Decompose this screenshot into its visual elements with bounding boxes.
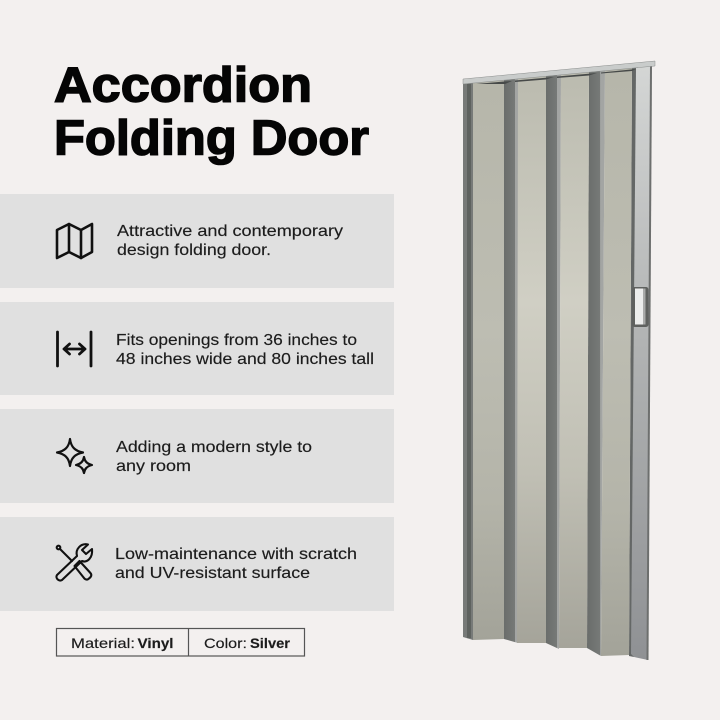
text: style description: any room — [116, 458, 191, 475]
text: design description — [117, 223, 343, 259]
icon: folded map — [57, 224, 92, 258]
panel: style — [0, 409, 394, 503]
panel: design — [0, 194, 394, 288]
title: Folding Door — [54, 112, 369, 166]
left jamb — [463, 83, 473, 640]
icon: crossed tools — [56, 544, 92, 581]
text: material — [71, 635, 174, 651]
panel: maintenance — [0, 517, 394, 611]
text: color: Silver — [250, 635, 291, 651]
panel: size — [0, 302, 394, 395]
text: color — [204, 635, 291, 651]
text: style description — [116, 439, 312, 475]
top rail — [463, 61, 655, 84]
text: size description: Fits openings from 36 inches to — [116, 332, 357, 349]
fold strips — [504, 77, 519, 643]
text: maintenance description: Low-maintenance with scratch — [115, 546, 357, 563]
text: material: Material: — [71, 635, 135, 651]
title: Accordion — [54, 58, 312, 112]
door illustration — [463, 61, 655, 660]
text: maintenance description — [115, 546, 357, 582]
text: style description: Adding a modern style to — [116, 439, 312, 456]
right edge panel — [631, 66, 652, 660]
text: color: Color: — [204, 635, 247, 651]
icon: sparkles — [57, 439, 92, 473]
rail shadow — [476, 69, 636, 84]
text: design description: Attractive and contemporary — [117, 223, 343, 240]
title — [54, 58, 369, 166]
text: size description: 48 inches wide and 80 inches tall — [116, 351, 374, 368]
text: size description — [116, 332, 374, 368]
icon: width arrows — [58, 332, 91, 366]
spec table: material and color — [56, 628, 304, 656]
text: maintenance description: and UV-resistant surface — [115, 565, 310, 582]
door handle — [632, 287, 648, 327]
light panels — [473, 80, 504, 640]
text: design description: design folding door. — [117, 242, 271, 259]
text: material: Vinyl — [138, 635, 174, 651]
